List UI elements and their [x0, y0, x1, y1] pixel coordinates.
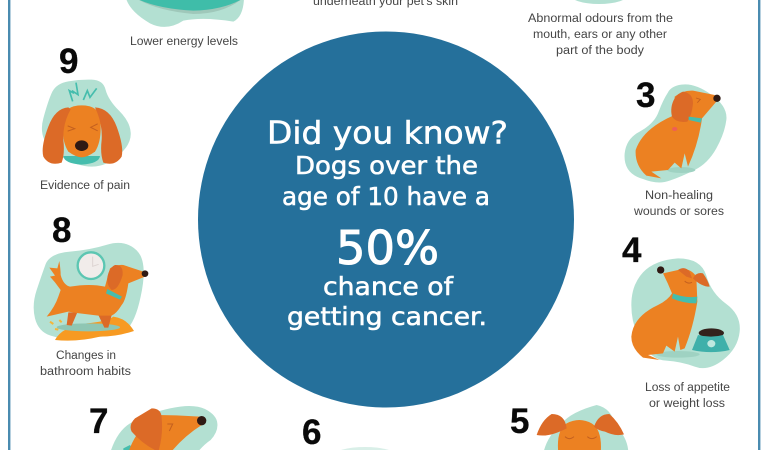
label: non-healing wounds: wounds or sores — [633, 206, 724, 218]
sign 4: loss of appetite — [622, 231, 740, 410]
icon: odours blob — [569, 0, 629, 4]
sign 7 — [89, 402, 217, 450]
text: dogs over the: Dogs over the — [295, 151, 478, 180]
icon: dog with clock and puddle — [34, 243, 148, 341]
label: changes in bathroom habits: bathroom habits — [40, 366, 131, 378]
sign 8: changes in bathroom habits — [34, 211, 148, 378]
sign 9: evidence of pain — [40, 42, 131, 192]
sign 3: non-healing wounds — [625, 76, 726, 218]
label: abnormal odours: mouth, ears or any other — [533, 29, 667, 41]
label: abnormal odours: part of the body — [556, 45, 644, 57]
icon: lower energy blob — [126, 0, 244, 27]
right border — [758, 0, 760, 450]
icon: dog looking up — [110, 406, 217, 450]
sign 6 — [302, 413, 397, 450]
number 7: 7 — [89, 402, 108, 441]
number 4: 4 — [622, 231, 642, 270]
label: changes in bathroom habits — [40, 350, 131, 378]
sign: abnormal odours — [528, 0, 673, 57]
sign: lower energy levels — [126, 0, 244, 48]
number 5: 5 — [510, 402, 529, 441]
left border — [8, 0, 10, 450]
icon: dog with food bowl — [631, 258, 740, 368]
label: non-healing wounds: Non-healing — [645, 190, 713, 202]
text: age of 10: age of 10 have a — [282, 182, 490, 211]
label: abnormal odours: Abnormal odours from the — [528, 13, 673, 25]
label: non-healing wounds — [633, 190, 724, 218]
icon: dog face — [537, 405, 628, 450]
number 8: 8 — [52, 211, 71, 250]
label: evidence of pain: Evidence of pain — [40, 180, 130, 192]
sign 5 — [510, 402, 628, 450]
icon: dog with wound — [625, 84, 726, 182]
number 3: 3 — [636, 76, 655, 115]
text: chance of: chance of — [323, 272, 454, 301]
label: loss of appetite — [645, 382, 730, 410]
central circle callout — [198, 32, 574, 408]
statistic: 50%: 50% — [336, 221, 439, 275]
text: getting cancer: getting cancer. — [287, 302, 487, 331]
icon: sign 6 blob — [333, 447, 397, 450]
number 9: 9 — [59, 42, 78, 81]
label: abnormal odours — [528, 13, 673, 57]
label: loss of appetite: Loss of appetite — [645, 382, 730, 394]
icon: dog in pain — [42, 80, 131, 167]
label: loss of appetite: or weight loss — [649, 398, 725, 410]
label: lower energy levels: Lower energy levels — [130, 36, 238, 48]
label: changes in bathroom habits: Changes in — [56, 350, 116, 362]
heading: did you know: Did you know? — [267, 116, 508, 152]
